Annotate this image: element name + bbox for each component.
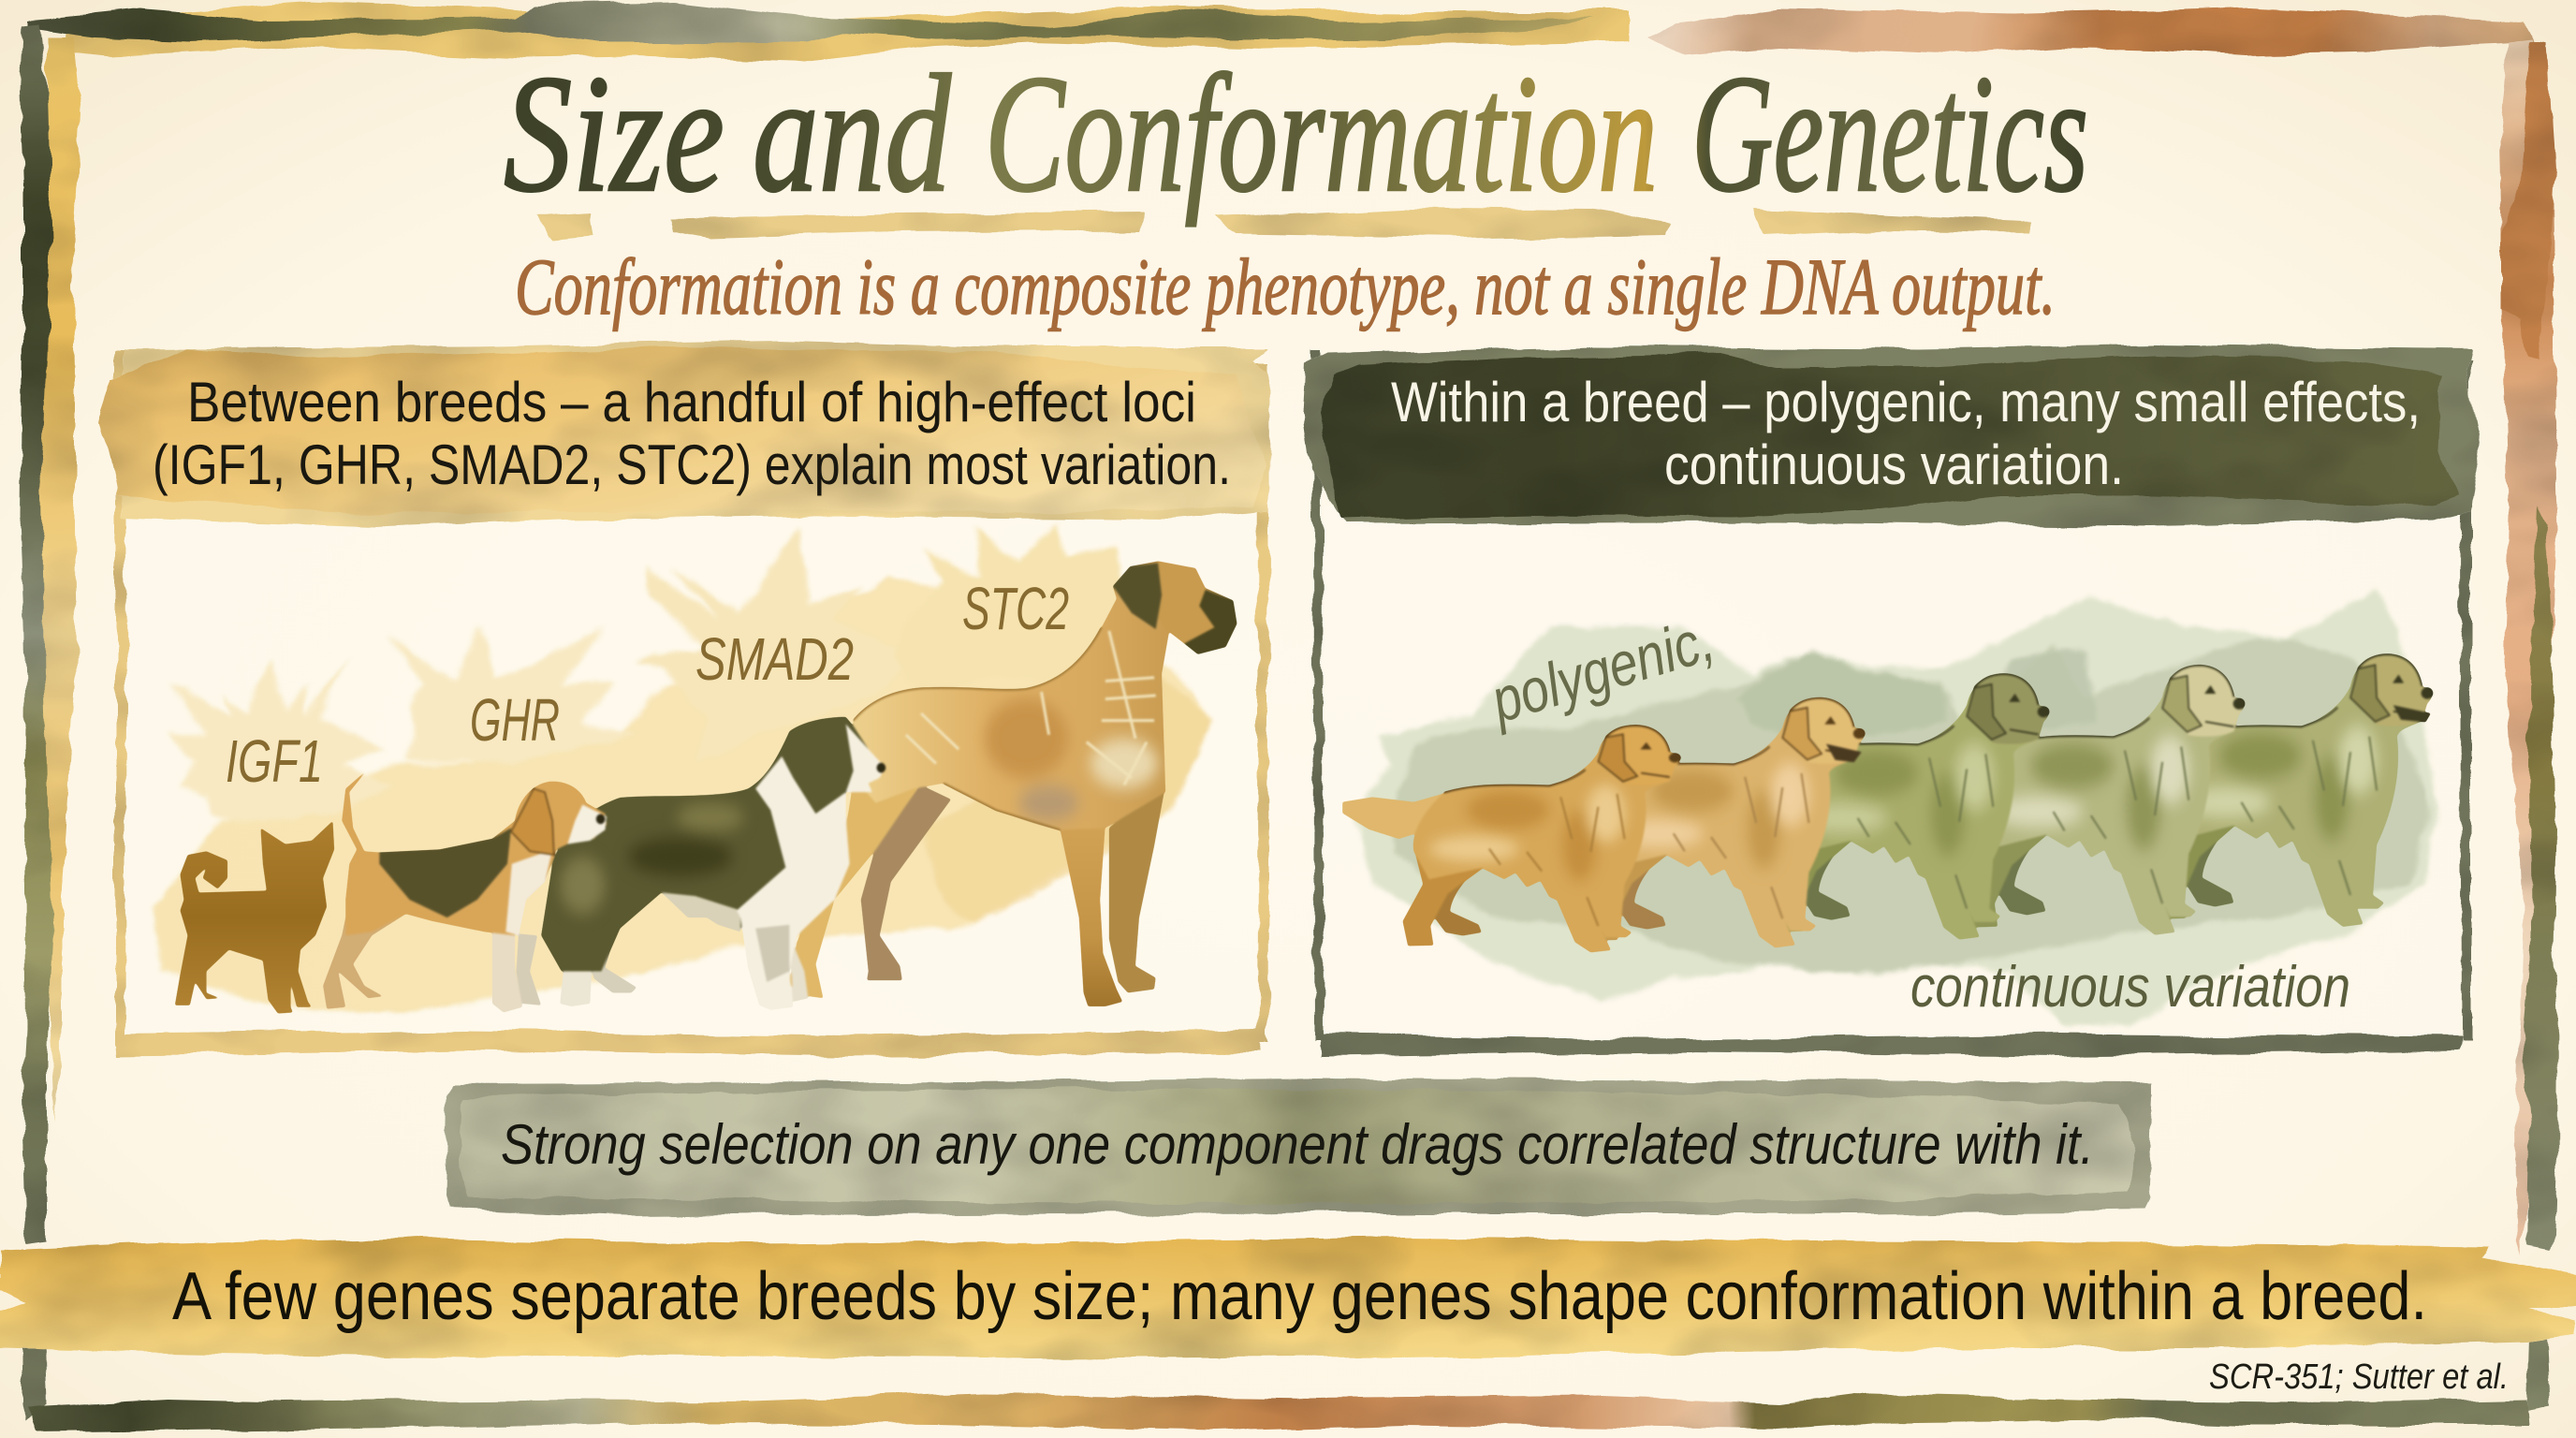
header text: [153, 371, 1231, 496]
frame: top olive stroke: [28, 2, 1591, 42]
title: [504, 40, 2088, 227]
callout wash box: [446, 1078, 2153, 1217]
dog: retriever 2: [1587, 698, 1866, 947]
frame: right peach stroke: [2499, 39, 2557, 1255]
label: IGF1: IGF1: [226, 727, 323, 795]
header band: [1303, 345, 2481, 526]
dog lineup illustration: [154, 523, 1237, 1014]
dog: retriever 1: [1342, 726, 1681, 952]
frame: left olive stroke: [19, 24, 52, 1243]
open mouth: retriever 5: [2393, 705, 2431, 723]
wash: mid layer: [1391, 636, 2429, 975]
title word: Conformation: Conformation: [985, 40, 1658, 227]
dog: border collie: [541, 717, 886, 1010]
panel frame strokes: [1312, 351, 2471, 1056]
title underline brush strokes: [537, 208, 2031, 238]
panel frame strokes: [116, 348, 1269, 1056]
label: STC2: STC2: [962, 575, 1069, 642]
header line 1: Within a breed – polygenic, many small effects,: [1391, 371, 2421, 433]
retriever lineup illustration: [1342, 591, 2437, 1026]
gold wash background: [154, 523, 1214, 1014]
wash: pale layer: [1354, 591, 2437, 1026]
header band: [98, 341, 1269, 527]
wash: darker top patches: [1737, 649, 1948, 742]
frame: left lower olive stub: [22, 1341, 47, 1423]
wash: right blob: [921, 678, 1214, 925]
title word: Size: Size: [504, 40, 724, 227]
banner wash: [0, 1238, 2576, 1359]
burst: IGF1: [168, 656, 394, 821]
header line 1: Between breeds – a handful of high-effect loci: [187, 371, 1196, 433]
title word: Genetics: Genetics: [1691, 40, 2088, 227]
sage wash background: [1354, 591, 2437, 1026]
dog: retriever 5: [2155, 654, 2433, 927]
wash: rising hill: [154, 578, 1214, 1014]
header line 2: continuous variation.: [1664, 433, 2124, 496]
dog: retriever 4: [1967, 666, 2246, 935]
burst: SMAD2: [636, 527, 906, 764]
frame: right orange patch: [2501, 42, 2555, 360]
frame: left yellow stroke: [39, 37, 80, 1123]
title word: and: and: [753, 40, 952, 227]
header line 2: (IGF1, GHR, SMAD2, STC2) explain most variation.: [153, 433, 1231, 496]
dog: great dane: [789, 561, 1237, 1006]
retrievers: [1342, 654, 2433, 952]
takeaway banner: [0, 1238, 2576, 1359]
header text: [1391, 371, 2421, 496]
frame: top yellow wash: [66, 2, 1629, 62]
label: SMAD2: SMAD2: [695, 625, 854, 693]
frame: right lower olive stub: [2527, 1333, 2551, 1409]
dog: beagle: [323, 769, 607, 1013]
gene labels: [226, 575, 1069, 795]
frame: right olive stroke: [2523, 506, 2558, 1250]
citation: SCR-351; Sutter et al.: [2209, 1357, 2509, 1397]
burst: GHR: [387, 624, 636, 764]
wash: darker patch behind dog three: [1978, 649, 2099, 733]
dog: retriever 3: [1771, 674, 2050, 940]
callout: correlated structure: [446, 1078, 2153, 1217]
panel interior: [1324, 506, 2460, 1044]
label: GHR: GHR: [470, 686, 560, 754]
label: polygenic: polygenic,: [1482, 604, 1721, 736]
panel interior: [124, 506, 1258, 1039]
frame: bottom multicolor stroke: [28, 1393, 2529, 1432]
dogs: [175, 561, 1237, 1014]
panel: between breeds: [98, 341, 1269, 1056]
callout text: Strong selection on any one component drags correlated structure with it.: [501, 1113, 2094, 1176]
frame: top orange stroke: [1647, 7, 2537, 54]
burst: STC2: [891, 523, 1162, 692]
panel: within a breed: [1303, 345, 2481, 1056]
label: continuous variation: continuous variation: [1910, 955, 2350, 1020]
open mouth: retriever 2: [1826, 744, 1862, 762]
dog: small silhouette: [175, 821, 334, 1014]
